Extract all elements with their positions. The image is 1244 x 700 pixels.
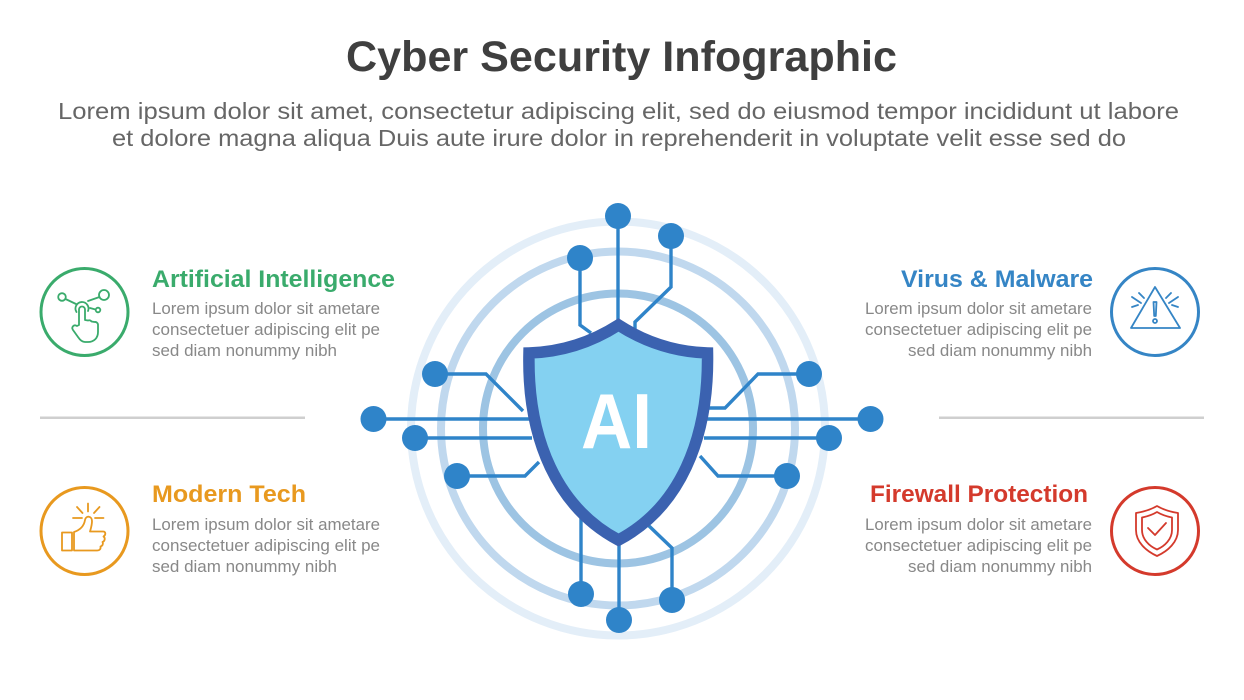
- heading: Firewall Protection: [870, 481, 1088, 508]
- description: sed diam nonummy nibh: [908, 341, 1092, 360]
- panel: artificial intelligence: [41, 266, 395, 360]
- concentric rings: [411, 222, 825, 636]
- panel: modern tech: [41, 481, 380, 576]
- description: [865, 515, 1092, 576]
- description: [152, 515, 380, 576]
- heading: Modern Tech: [152, 481, 306, 508]
- description: consectetuer adipiscing elit pe: [865, 536, 1092, 555]
- circuit lines: [373, 216, 870, 620]
- description: Lorem ipsum dolor sit ametare: [152, 515, 380, 534]
- description: Lorem ipsum dolor sit ametare: [152, 299, 380, 318]
- central diagram: AI shield with circuit rings: [360, 203, 884, 636]
- description: [152, 299, 380, 360]
- description: consectetuer adipiscing elit pe: [152, 320, 380, 339]
- description: Lorem ipsum dolor sit ametare: [865, 515, 1092, 534]
- circuit nodes: [360, 203, 884, 633]
- shield: [529, 325, 708, 540]
- description: [865, 299, 1092, 360]
- panel: virus and malware: [865, 266, 1198, 360]
- description: consectetuer adipiscing elit pe: [152, 536, 380, 555]
- icon: shield check: [1112, 488, 1198, 574]
- subtitle text: Lorem ipsum dolor sit amet, consectetur adipiscing elit, sed do eiusmod tempor incididunt ut labore: [58, 98, 1179, 124]
- icon: warning triangle: [1112, 268, 1198, 356]
- description: sed diam nonummy nibh: [152, 557, 337, 576]
- subtitle text: [58, 98, 1179, 151]
- description: sed diam nonummy nibh: [152, 341, 337, 360]
- panel: firewall protection: [865, 481, 1198, 576]
- heading: Virus & Malware: [901, 266, 1093, 293]
- description: Lorem ipsum dolor sit ametare: [865, 299, 1092, 318]
- description: consectetuer adipiscing elit pe: [865, 320, 1092, 339]
- subtitle text: et dolore magna aliqua Duis aute irure dolor in reprehenderit in voluptate velit esse sed do: [112, 125, 1126, 151]
- icon: thumbs up: [41, 488, 128, 574]
- icon: hand touching network: [41, 268, 128, 356]
- shield label: AI: [581, 377, 652, 465]
- left divider: [40, 416, 305, 419]
- heading: Artificial Intelligence: [152, 266, 395, 293]
- title: Cyber Security Infographic: [346, 33, 897, 81]
- description: sed diam nonummy nibh: [908, 557, 1092, 576]
- right divider: [939, 416, 1204, 419]
